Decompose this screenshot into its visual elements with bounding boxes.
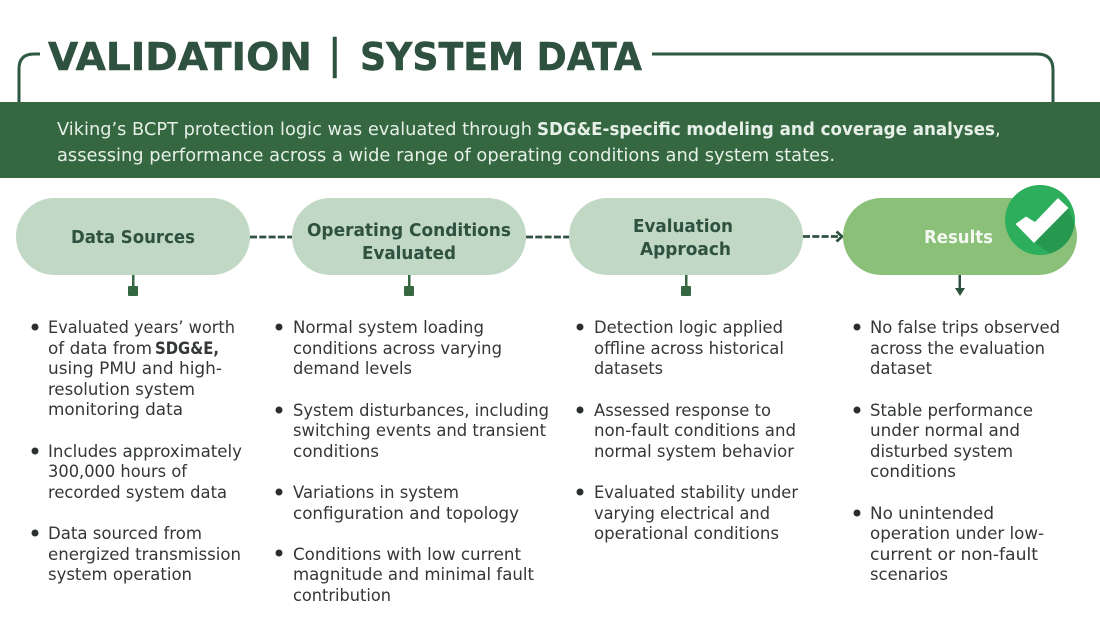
stem: data sources (128, 275, 138, 296)
pill: results: Results (924, 228, 993, 248)
pill: operating conditions: Operating Conditions (307, 221, 511, 241)
text block: results list: conditions (870, 462, 956, 481)
panel: intro banner: assessing performance across a wide range of operating conditions and system states. (57, 145, 835, 166)
text block: data sources list: recorded system data (48, 483, 227, 502)
text block: data sources list: Evaluated years’ worth (48, 318, 235, 337)
text block: operating conditions list: configuration and topology (293, 504, 519, 523)
text block: results list: No false trips observed (870, 318, 1060, 337)
title: SYSTEM DATA (360, 35, 642, 80)
text block: results list: current or non-fault (870, 545, 1039, 564)
text block: operating conditions list: Conditions with low current (293, 545, 522, 564)
text block: data sources list: resolution system (48, 380, 195, 399)
text block: operating conditions list: conditions across varying (293, 339, 502, 358)
text block: evaluation approach list (576, 318, 798, 543)
text block: operating conditions list: demand levels (293, 359, 412, 378)
text block: results list: scenarios (870, 565, 948, 584)
text block: results list: across the evaluation (870, 339, 1045, 358)
text block: data sources list: Data sourced from (48, 524, 202, 543)
text block: evaluation approach list: normal system behavior (594, 442, 794, 461)
text block: evaluation approach list: Detection logic applied (594, 318, 783, 337)
pill: results (843, 198, 1077, 275)
text block: evaluation approach list: Assessed response to (594, 401, 771, 420)
text block: data sources list (32, 318, 242, 584)
title (48, 35, 642, 80)
pill: data sources: Data Sources (71, 228, 195, 248)
pill: evaluation approach (569, 198, 803, 275)
pill: evaluation approach: Evaluation (633, 217, 733, 237)
panel: intro banner: SDG&E-specific modeling and coverage analyses (537, 119, 995, 140)
connector: sources to conditions (250, 236, 292, 238)
text block: results list (854, 318, 1060, 584)
text block: results list: Stable performance (870, 401, 1033, 420)
panel: intro banner (0, 102, 1100, 178)
text block: results list: No unintended (870, 504, 994, 523)
connector: conditions to approach (526, 236, 569, 238)
text block: operating conditions list (276, 318, 549, 605)
panel: intro banner: Viking’s BCPT protection logic was evaluated through (57, 119, 532, 140)
text block: results list: disturbed system (870, 442, 1013, 461)
arrow: results stem (955, 275, 965, 296)
pill: operating conditions: Evaluated (362, 244, 456, 264)
text block: operating conditions list: contribution (293, 586, 391, 605)
text block: operating conditions list: conditions (293, 442, 379, 461)
icon: check badge (1005, 185, 1075, 255)
text block: results list: operation under low- (870, 524, 1044, 543)
text block: data sources list: system operation (48, 565, 192, 584)
text block: operating conditions list: System disturbances, including (293, 401, 549, 420)
title: VALIDATION (48, 35, 312, 80)
title bracket (19, 54, 1053, 102)
text block: operating conditions list: Variations in system (293, 483, 459, 502)
text block: data sources list: of data from (48, 339, 152, 358)
stem: evaluation approach (681, 275, 691, 296)
text block: data sources list: using PMU and high- (48, 359, 222, 378)
pill: evaluation approach: Approach (640, 240, 731, 260)
text block: evaluation approach list: Evaluated stability under (594, 483, 798, 502)
text block: results list: under normal and (870, 421, 1020, 440)
text block: evaluation approach list: varying electrical and (594, 504, 770, 523)
panel: intro banner: , (995, 119, 1001, 140)
text block: operating conditions list: Normal system loading (293, 318, 484, 337)
stem: operating conditions (404, 275, 414, 296)
text block: data sources list: monitoring data (48, 400, 183, 419)
arrow: approach to results (803, 232, 842, 242)
text block: evaluation approach list: operational conditions (594, 524, 779, 543)
text block: data sources list: Includes approximately (48, 442, 242, 461)
pill: operating conditions (292, 198, 526, 275)
text block: operating conditions list: switching events and transient (293, 421, 547, 440)
text block: data sources list: energized transmission (48, 545, 241, 564)
text block: evaluation approach list: offline across historical (594, 339, 784, 358)
text block: results list: dataset (870, 359, 933, 378)
pill: data sources (16, 198, 250, 275)
text block: data sources list: SDG&E, (155, 339, 219, 358)
text block: data sources list: 300,000 hours of (48, 462, 188, 481)
text block: operating conditions list: magnitude and minimal fault (293, 565, 535, 584)
text block: evaluation approach list: non-fault conditions and (594, 421, 796, 440)
text block: evaluation approach list: datasets (594, 359, 663, 378)
